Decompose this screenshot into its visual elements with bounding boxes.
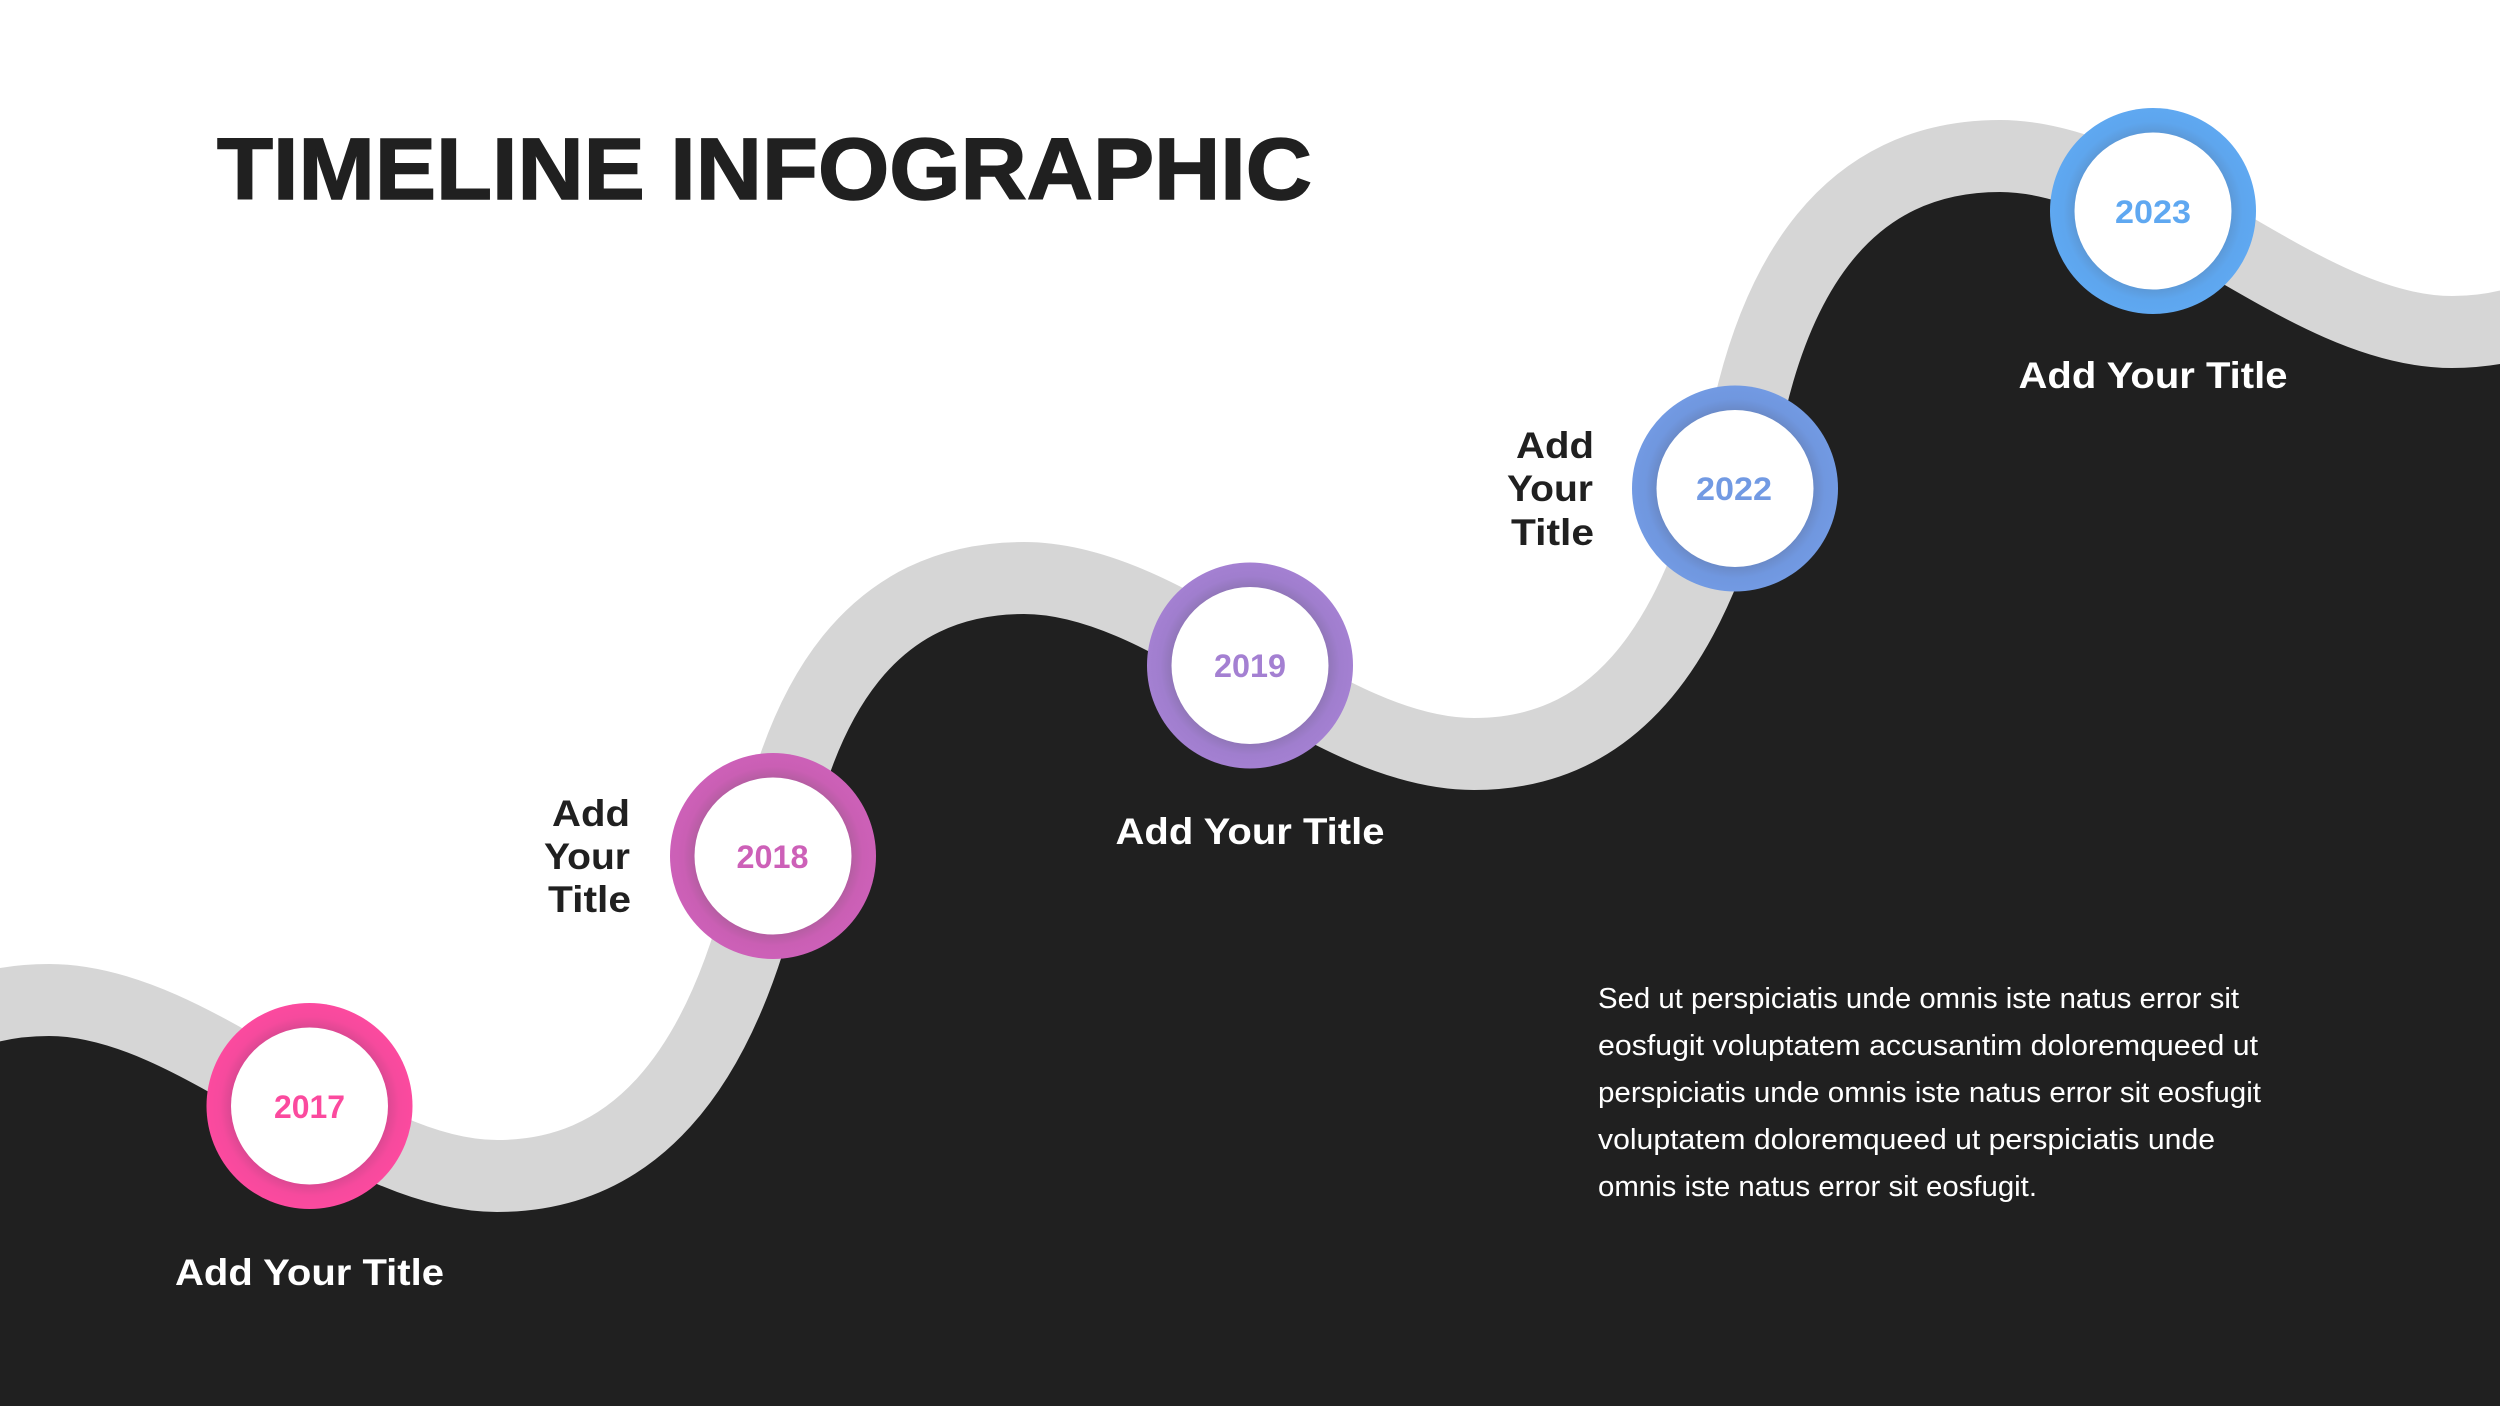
milestone 2017	[175, 1003, 444, 1293]
description paragraph: perspiciatis unde omnis iste natus error sit eosfugit	[1598, 1077, 2261, 1109]
title: TIMELINE INFOGRAPHIC	[217, 121, 1312, 218]
marker center 2023	[2074, 132, 2232, 290]
year 2023: 2023	[2115, 194, 2191, 230]
label 2022: Add	[1516, 425, 1594, 466]
marker ring 2017	[206, 1003, 412, 1209]
marker ring 2019	[1147, 562, 1353, 768]
label 2017: Add Your Title	[175, 1252, 444, 1293]
year 2017: 2017	[274, 1089, 345, 1125]
label 2022: Title	[1511, 512, 1594, 553]
marker center 2017	[231, 1028, 388, 1184]
milestone 2018	[544, 753, 876, 959]
milestone 2022	[1507, 386, 1838, 592]
description paragraph: omnis iste natus error sit eosfugit.	[1598, 1171, 2037, 1203]
label 2018: Your	[544, 836, 630, 877]
marker center 2018	[694, 778, 852, 934]
label 2023: Add Your Title	[2018, 355, 2288, 396]
description paragraph: eosfugit voluptatem accusantim doloremqueed ut	[1598, 1030, 2258, 1062]
milestone 2019	[1116, 562, 1384, 852]
label 2022: Your	[1507, 468, 1593, 509]
year 2022: 2022	[1696, 471, 1772, 507]
year 2018: 2018	[736, 839, 808, 875]
description paragraph: voluptatem doloremqueed ut perspiciatis unde	[1598, 1124, 2215, 1156]
marker ring 2023	[2050, 108, 2256, 314]
marker center 2019	[1172, 587, 1328, 744]
milestone 2023	[2018, 108, 2288, 396]
marker center 2022	[1656, 410, 1814, 567]
description paragraph: Sed ut perspiciatis unde omnis iste natus error sit	[1598, 983, 2239, 1015]
description paragraph	[1598, 983, 2261, 1203]
label 2022	[1507, 425, 1594, 553]
label 2018: Title	[548, 879, 631, 920]
label 2018: Add	[552, 793, 630, 834]
label 2019: Add Your Title	[1116, 811, 1384, 852]
label 2018	[544, 793, 631, 920]
marker ring 2018	[670, 753, 876, 959]
year 2019: 2019	[1214, 648, 1286, 684]
marker ring 2022	[1632, 386, 1838, 592]
